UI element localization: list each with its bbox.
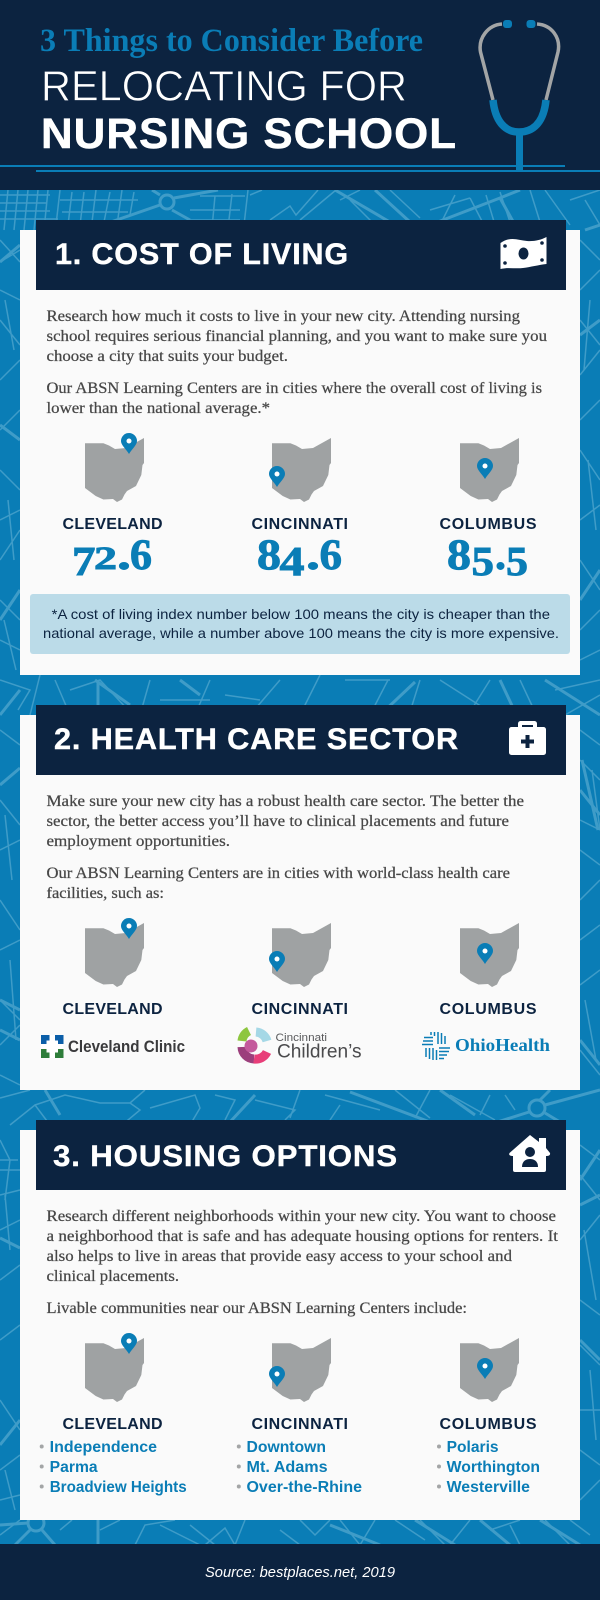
list: Cincinnati communities: Mt. Adams bbox=[246, 1459, 328, 1476]
logo: Cleveland Clinic bbox=[41, 1035, 185, 1058]
text block: housing intro: clinical placements. bbox=[46, 1268, 179, 1285]
number: Cleveland index 72.6 bbox=[72, 532, 152, 584]
header rule lines bbox=[0, 165, 600, 172]
number: Cleveland index 72.6: . bbox=[117, 532, 131, 579]
logo: OhioHealth: OhioHealth bbox=[455, 1035, 550, 1055]
number: Cincinnati index 84.6: 4 bbox=[280, 538, 304, 584]
list: Columbus communities bbox=[437, 1439, 540, 1496]
text block: health care intro: Our ABSN Learning Centers are in cities with world-class health care bbox=[46, 865, 510, 882]
list: Cleveland communities: Independence bbox=[50, 1439, 157, 1456]
header banner bbox=[0, 0, 600, 190]
list: Columbus communities: Polaris bbox=[447, 1439, 499, 1456]
list: Cleveland communities: Parma bbox=[50, 1459, 98, 1476]
panel: health care sector bbox=[20, 705, 580, 1090]
text block: cost of living intro: choose a city that suits your budget. bbox=[46, 348, 288, 365]
list: Columbus communities: Worthington bbox=[447, 1459, 540, 1476]
city label: Cleveland: CLEVELAND bbox=[62, 516, 162, 533]
section heading bar: health care sector bbox=[36, 705, 566, 775]
list: Cincinnati communities bbox=[237, 1439, 362, 1496]
number: Cincinnati index 84.6: 8 bbox=[257, 532, 281, 579]
section heading bar: cost of living: 1. COST OF LIVING bbox=[55, 238, 349, 271]
list: Cincinnati communities: Downtown bbox=[246, 1439, 326, 1456]
icon: Ohio map with Cleveland pin bbox=[85, 1333, 144, 1402]
number: Columbus index 85.5: 8 bbox=[447, 532, 471, 579]
text block: cost of living intro: lower than the national average.* bbox=[46, 400, 270, 417]
city label: Cleveland: CLEVELAND bbox=[62, 1001, 162, 1018]
callout: cost of living index note bbox=[30, 594, 570, 654]
number: Columbus index 85.5: 5 bbox=[472, 538, 494, 584]
icon: Ohio map with Cleveland pin bbox=[85, 918, 144, 987]
number: Columbus index 85.5 bbox=[447, 532, 528, 584]
city label: Cincinnati: CINCINNATI bbox=[252, 516, 348, 533]
text block: health care intro: sector, the better access you’ll have to clinical placements and future bbox=[46, 813, 509, 830]
number: Columbus index 85.5: 5 bbox=[506, 538, 528, 584]
icon: stethoscope bbox=[480, 20, 559, 171]
number: Cleveland index 72.6: 2 bbox=[94, 541, 117, 577]
logo: OhioHealth bbox=[422, 1032, 550, 1060]
text block: cost of living intro bbox=[46, 308, 547, 417]
icon: money bill bbox=[500, 237, 546, 269]
icon: Ohio map with Cincinnati pin bbox=[269, 923, 331, 987]
text block: health care intro: facilities, such as: bbox=[46, 885, 164, 902]
footer: source bbox=[0, 1544, 600, 1600]
list: Cincinnati communities: Over-the-Rhine bbox=[246, 1479, 362, 1496]
icon: Ohio map with Cincinnati pin bbox=[269, 1338, 331, 1402]
text block: housing intro: Livable communities near our ABSN Learning Centers include: bbox=[46, 1300, 467, 1317]
text block: health care intro bbox=[46, 793, 524, 902]
icon: Ohio map with Cincinnati pin bbox=[269, 438, 331, 502]
text block: cost of living intro: Our ABSN Learning Centers are in cities where the overall cost of living is bbox=[46, 380, 542, 397]
logo: Cleveland Clinic: Cleveland Clinic bbox=[68, 1037, 185, 1056]
icon: Ohio map with Cleveland pin bbox=[85, 433, 144, 502]
panel: housing options bbox=[20, 1120, 580, 1520]
list: Cleveland communities: Broadview Heights bbox=[50, 1479, 187, 1496]
text block: housing intro: a neighborhood that is safe and has adequate housing options for renters. It bbox=[46, 1228, 559, 1245]
section heading bar: housing options: 3. HOUSING OPTIONS bbox=[53, 1140, 398, 1173]
callout: cost of living index note: national average, while a number above 100 means the city is more expensive. bbox=[43, 625, 559, 641]
city label: Cleveland: CLEVELAND bbox=[62, 1416, 162, 1433]
icon: Ohio map with Columbus pin bbox=[460, 923, 519, 987]
callout: cost of living index note: *A cost of living index number below 100 means the city is cheaper than the bbox=[52, 606, 550, 622]
city label: Columbus: COLUMBUS bbox=[440, 1001, 537, 1018]
icon: house with person bbox=[509, 1135, 550, 1172]
section heading bar: cost of living bbox=[36, 220, 566, 290]
text block: health care intro: employment opportunities. bbox=[46, 833, 230, 850]
icon: Ohio map with Columbus pin bbox=[460, 1338, 519, 1402]
number: Cleveland index 72.6: 6 bbox=[130, 532, 152, 579]
logo: Cincinnati Children's: Children’s bbox=[277, 1042, 362, 1063]
number: Cincinnati index 84.6 bbox=[257, 532, 342, 584]
section heading bar: housing options bbox=[36, 1120, 566, 1190]
title: 3 things to consider before: 3 Things to Consider Before bbox=[40, 23, 423, 59]
text block: housing intro: Research different neighborhoods within your new city. You want to choose bbox=[46, 1208, 556, 1225]
icon: medical kit bbox=[509, 721, 546, 755]
city label: Cincinnati: CINCINNATI bbox=[252, 1416, 348, 1433]
section heading bar: health care sector: 2. HEALTH CARE SECTOR bbox=[54, 723, 459, 756]
text block: cost of living intro: school requires serious financial planning, and you want to make sure you bbox=[46, 328, 547, 345]
text block: housing intro bbox=[46, 1208, 559, 1317]
icon: Ohio map with Columbus pin bbox=[460, 438, 519, 502]
number: Cincinnati index 84.6: . bbox=[306, 532, 320, 579]
panel: cost of living bbox=[20, 220, 580, 675]
footer: source: Source: bestplaces.net, 2019 bbox=[205, 1565, 395, 1581]
list: Cleveland communities bbox=[40, 1439, 187, 1496]
list: Columbus communities: Westerville bbox=[447, 1479, 530, 1496]
logo: Cincinnati Children's: Cincinnati bbox=[276, 1032, 327, 1044]
text block: health care intro: Make sure your new city has a robust health care sector. The better the bbox=[46, 793, 524, 810]
title: relocating for: RELOCATING FOR bbox=[41, 63, 407, 111]
title: nursing school: NURSING SCHOOL bbox=[41, 110, 457, 158]
text block: cost of living intro: Research how much it costs to live in your new city. Attending nursing bbox=[46, 308, 520, 325]
number: Cleveland index 72.6: 7 bbox=[72, 538, 96, 584]
number: Cincinnati index 84.6: 6 bbox=[320, 532, 342, 579]
logo: Cincinnati Children's bbox=[242, 1031, 362, 1063]
city label: Columbus: COLUMBUS bbox=[440, 1416, 537, 1433]
text block: housing intro: also helps to live in areas that provide easy access to your school and bbox=[46, 1248, 512, 1265]
city label: Columbus: COLUMBUS bbox=[440, 516, 537, 533]
city label: Cincinnati: CINCINNATI bbox=[252, 1001, 348, 1018]
number: Columbus index 85.5: . bbox=[495, 532, 506, 579]
